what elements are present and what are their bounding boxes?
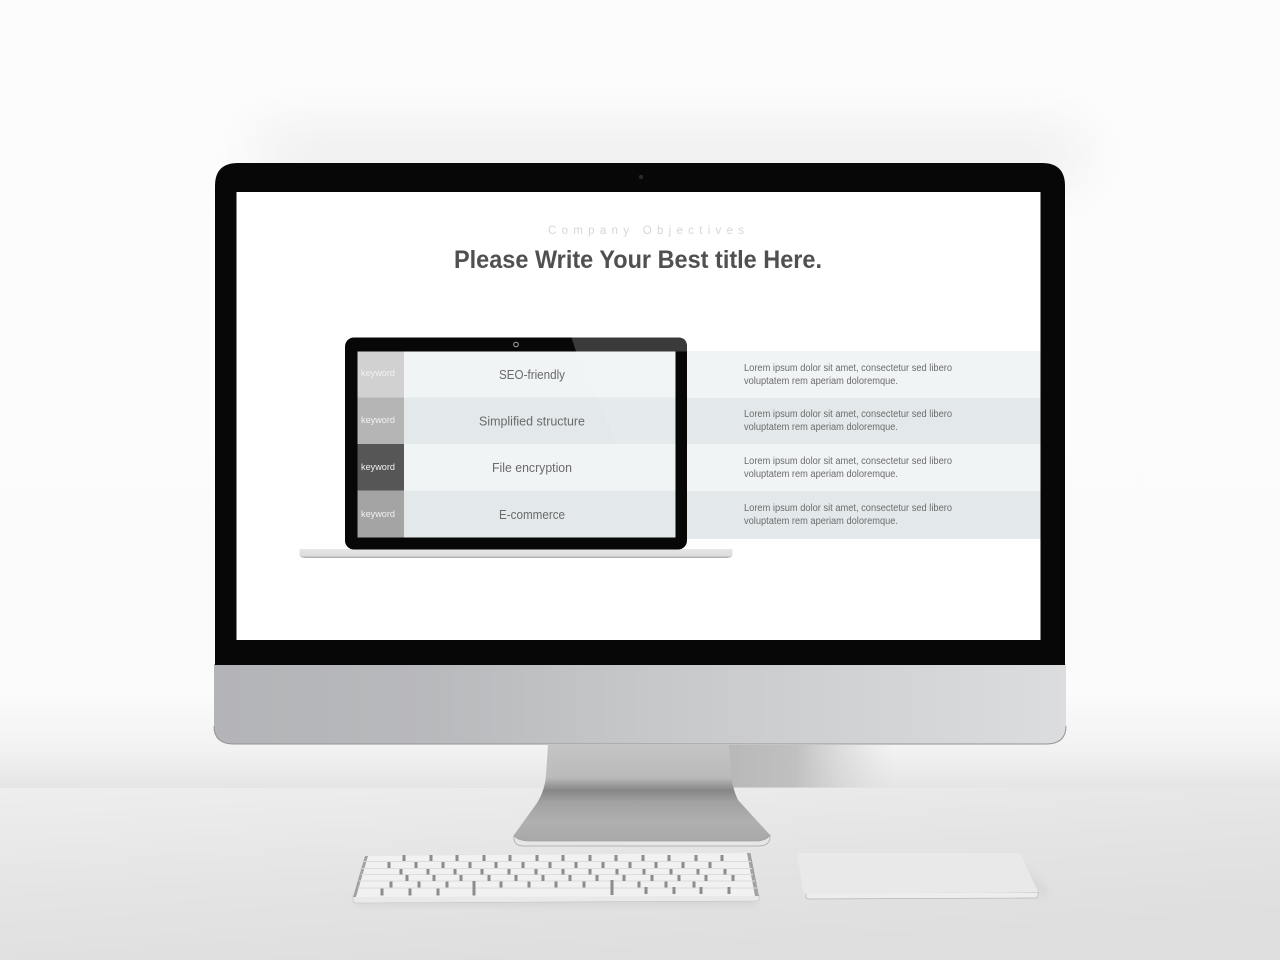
webcam bbox=[639, 175, 643, 179]
laptop base bbox=[300, 549, 732, 558]
keyboard key gaps bbox=[382, 855, 733, 896]
row 1: SEO-friendly bbox=[358, 352, 676, 398]
keyboard row lines bbox=[358, 862, 757, 888]
slide screen bbox=[236, 192, 1040, 640]
row 2: Simplified structure bbox=[358, 398, 676, 444]
title: Please Write Your Best title Here. bbox=[454, 246, 822, 274]
laptop bbox=[300, 338, 732, 558]
strip 1 bbox=[686, 351, 1040, 398]
row 2: Simplified structure: keyword bbox=[361, 415, 395, 426]
description strips bbox=[686, 351, 1040, 539]
strip 1: Lorem ipsum dolor sit amet, consectetur sed libero bbox=[744, 363, 952, 374]
keyboard shadow bbox=[356, 899, 756, 904]
strip 4 bbox=[686, 491, 1040, 539]
strip 3 bbox=[686, 444, 1040, 491]
row 3: File encryption: File encryption bbox=[492, 461, 572, 475]
row 4: E-commerce: E-commerce bbox=[499, 508, 565, 522]
trackpad surface bbox=[797, 853, 1038, 894]
laptop screen reflection bbox=[576, 352, 676, 444]
strip 4: voluptatem rem aperiam doloremque. bbox=[744, 516, 898, 527]
monitor bezel bbox=[215, 163, 1065, 665]
trackpad bbox=[797, 853, 1050, 899]
monitor bbox=[214, 163, 1066, 744]
strip 1: voluptatem rem aperiam doloremque. bbox=[744, 376, 898, 387]
row 1: SEO-friendly: SEO-friendly bbox=[499, 368, 566, 382]
strip 2 bbox=[686, 398, 1040, 444]
strip 2: Lorem ipsum dolor sit amet, consectetur sed libero bbox=[744, 409, 952, 420]
row 3: File encryption: keyword bbox=[361, 462, 395, 473]
strip 3: voluptatem rem aperiam doloremque. bbox=[744, 469, 898, 480]
monitor stand bbox=[514, 745, 770, 846]
laptop glare bbox=[572, 338, 687, 352]
row 2: Simplified structure: Simplified structure bbox=[479, 414, 585, 428]
strip 4: Lorem ipsum dolor sit amet, consectetur sed libero bbox=[744, 503, 952, 514]
monitor chin bbox=[214, 664, 1066, 744]
row 4: E-commerce bbox=[358, 490, 676, 538]
trackpad shadow bbox=[1020, 860, 1050, 895]
strip 2: voluptatem rem aperiam doloremque. bbox=[744, 422, 898, 433]
strip 3: Lorem ipsum dolor sit amet, consectetur sed libero bbox=[744, 456, 952, 467]
laptop body bbox=[345, 338, 687, 550]
row 3: File encryption bbox=[358, 444, 676, 490]
row 1: SEO-friendly: keyword bbox=[361, 368, 395, 379]
keyboard front edge bbox=[353, 895, 759, 903]
trackpad front edge bbox=[806, 892, 1038, 899]
keyboard bbox=[353, 853, 759, 904]
keyboard top bbox=[353, 853, 759, 897]
keyboard edges bbox=[353, 853, 759, 897]
subtitle: Company Objectives bbox=[548, 225, 744, 237]
laptop camera bbox=[514, 342, 518, 347]
row 4: E-commerce: keyword bbox=[361, 509, 395, 520]
monitor chin lower edge bbox=[214, 726, 1066, 744]
